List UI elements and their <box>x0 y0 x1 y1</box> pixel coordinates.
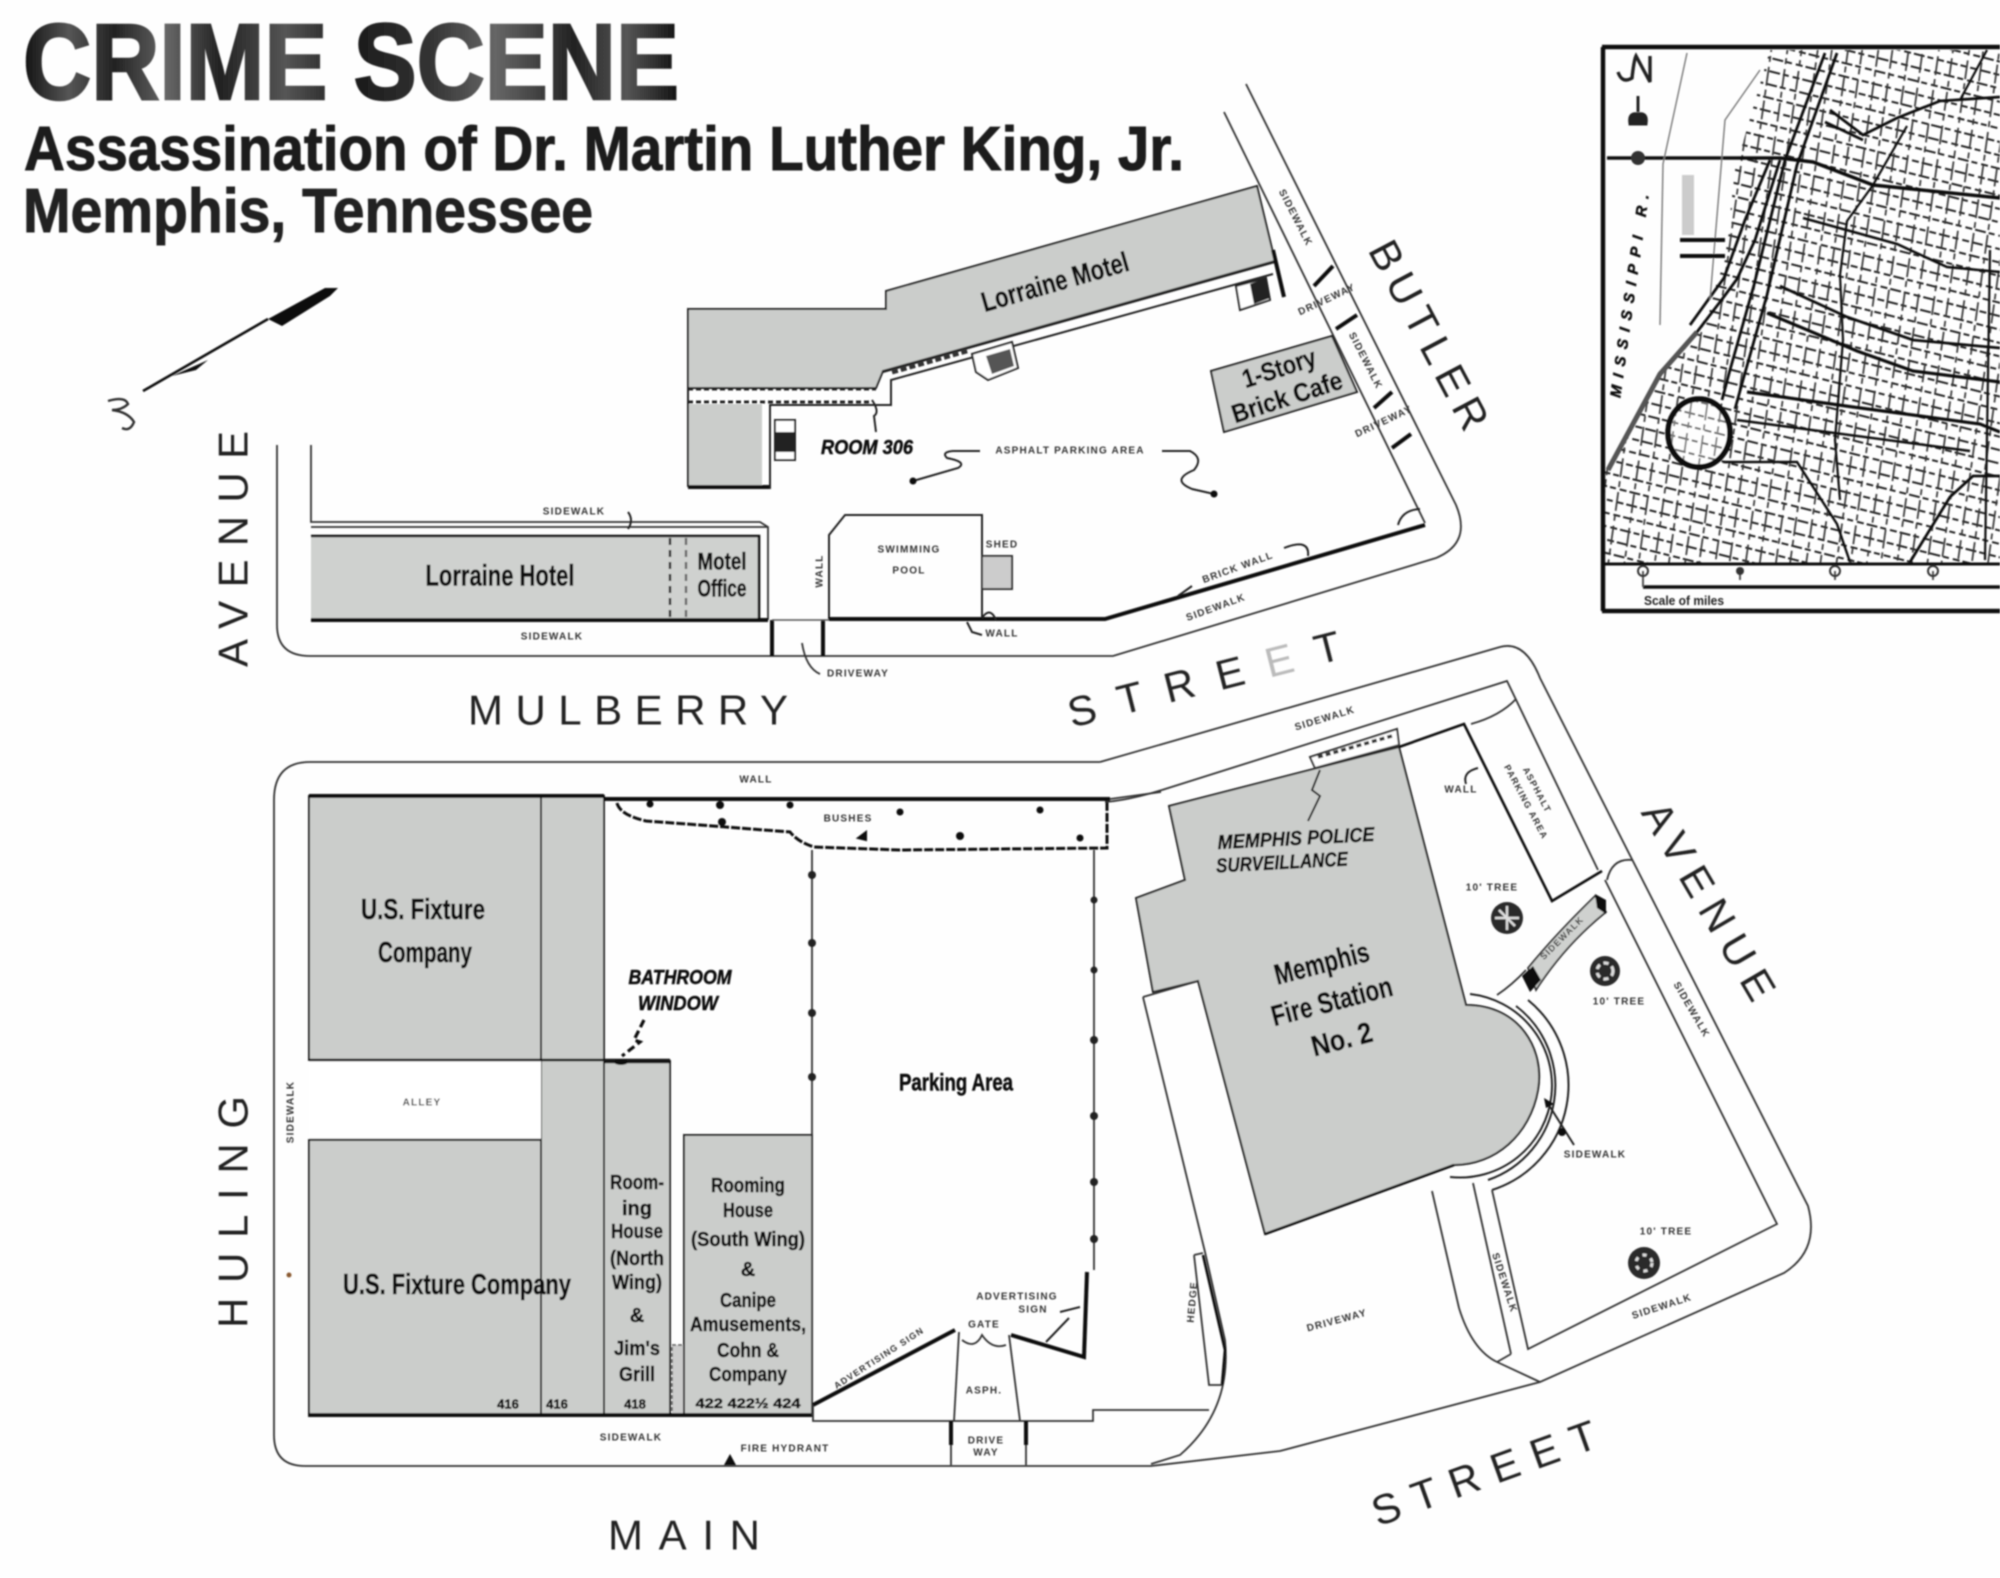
map major roads <box>1607 50 2000 562</box>
bushes and top wall: WALL <box>739 774 773 786</box>
Rooming House south wing: House <box>723 1200 773 1222</box>
Rooming House south wing: (South Wing) <box>691 1229 805 1251</box>
tree three: 10' TREE <box>1640 1226 1692 1238</box>
U.S. Fixture Company south building: 416 <box>497 1396 519 1412</box>
map scale bar: Scale of miles <box>1644 593 1724 608</box>
sidewalk labels around fire station: SIDEWALK <box>1294 705 1356 733</box>
U.S. Fixture Company north building: U.S. Fixture <box>361 894 485 926</box>
advertising signs and gate <box>813 1272 1209 1421</box>
advertising signs and gate: GATE <box>968 1320 1000 1330</box>
map location circle <box>1668 399 1730 467</box>
Room 306 callout: ROOM 306 <box>821 437 914 459</box>
asphalt parking area label (fire station): PARKING AREA <box>1502 763 1550 841</box>
south perimeter brick wall <box>829 525 1425 619</box>
fire station property wall and sidewalks <box>1105 681 1777 1382</box>
1-story brick cafe: Brick Cafe <box>1228 365 1346 429</box>
subtitle line: location: Memphis, Tennessee <box>23 177 593 246</box>
Butler sidewalk and driveway labels: DRIVEWAY <box>1354 404 1414 440</box>
Butler sidewalk and driveway labels: DRIVEWAY <box>1297 282 1357 318</box>
Rooming House north wing: ing <box>622 1198 652 1220</box>
alley: ALLEY <box>403 1098 441 1108</box>
Mulberry sidewalk labels: WALL <box>814 554 826 588</box>
tree one: 10' TREE <box>1466 882 1518 894</box>
Lorraine Hotel building <box>311 536 768 620</box>
street label: Butler: BUTLER <box>1359 232 1499 438</box>
wall label by parking area: WALL <box>1444 784 1478 796</box>
inset map <box>1602 47 2000 611</box>
Rooming House south wing: Amusements, <box>690 1314 806 1336</box>
Mulberry sidewalk labels: SIDEWALK <box>521 632 583 642</box>
Rooming House north wing: & <box>630 1305 644 1327</box>
Rooming House south wing: Company <box>709 1364 788 1386</box>
sidewalk labels around fire station: SIDEWALK <box>1489 1252 1519 1314</box>
tree two <box>1590 956 1645 1008</box>
Rooming House north wing: House <box>611 1221 663 1243</box>
Rooming House north wing: Wing) <box>612 1272 662 1294</box>
1-story brick cafe: 1-Story <box>1238 342 1320 394</box>
Mulberry sidewalk labels: SIDEWALK <box>1185 592 1247 624</box>
curved sidewalk strip: SIDEWALK <box>1538 914 1586 962</box>
curved driveway edge with hedge: HEDGE <box>1186 1281 1200 1323</box>
brick wall label: BRICK WALL <box>1201 550 1275 586</box>
Rooming House south wing: Cohn & <box>717 1340 779 1362</box>
Mulberry sidewalk labels: SIDEWALK <box>543 506 605 518</box>
north block sidewalk lines <box>311 112 1425 620</box>
Rooming House north wing: 418 <box>624 1396 646 1412</box>
Butler sidewalk and driveway labels: SIDEWALK <box>1276 188 1314 248</box>
street label: Street (Mulberry): STR E E T <box>1063 622 1345 736</box>
sidewalk labels around fire station: SIDEWALK <box>1671 980 1711 1040</box>
curved driveway edge with hedge <box>1143 997 1226 1464</box>
curved sidewalk strip <box>1497 894 1606 995</box>
advertising signs and gate: ADVERTISING SIGN <box>832 1325 926 1391</box>
Rooming House north wing: (North <box>610 1248 664 1270</box>
bathroom window callout: WINDOW <box>638 993 720 1015</box>
U.S. Fixture Company south building: U.S. Fixture Company <box>343 1269 571 1301</box>
sidewalk labels around fire station: SIDEWALK <box>1564 1150 1626 1160</box>
panel: north block (Lorraine Motel site) <box>277 84 1461 680</box>
Huling and Main sidewalk labels: SIDEWALK <box>286 1081 296 1143</box>
Rooming House north wing: Jim's <box>614 1338 660 1360</box>
north block curb line <box>277 84 1461 656</box>
Main Street building line <box>309 796 812 1415</box>
sidewalk labels around fire station <box>1294 705 1711 1334</box>
driveway on Mulberry: DRIVEWAY <box>827 668 889 680</box>
Room 306 callout <box>821 400 914 459</box>
street label: Mulberry: MULBERRY <box>468 686 788 734</box>
Mulberry sidewalk labels: WALL <box>985 628 1019 640</box>
map scale bar <box>1638 566 2000 608</box>
Lorraine Motel building: Lorraine Motel <box>978 246 1132 318</box>
fire hydrant <box>724 1444 829 1465</box>
passage between rooming house wings <box>672 1345 684 1414</box>
shed <box>982 540 1018 589</box>
alley <box>309 1060 670 1140</box>
asphalt parking area label with arrows: ASPHALT PARKING AREA <box>995 446 1145 456</box>
Memphis police surveillance callout <box>1216 729 1399 877</box>
icon: site north arrow <box>108 288 338 429</box>
map river shading <box>1682 175 1694 235</box>
Lorraine Hotel building: Lorraine Hotel <box>426 560 574 592</box>
Lorraine Hotel building: Office <box>698 576 746 602</box>
Rooming House south wing: & <box>741 1259 755 1281</box>
swimming pool <box>829 515 982 619</box>
asphalt parking area label with arrows <box>910 446 1218 498</box>
Memphis Fire Station No. 2: No. 2 <box>1308 1017 1376 1063</box>
Butler driveway marks <box>1314 266 1411 448</box>
Memphis police surveillance callout: MEMPHIS POLICE <box>1217 824 1376 854</box>
Rooming House south wing: Rooming <box>711 1175 785 1197</box>
Rooming House north wing: Room- <box>610 1172 664 1194</box>
parking area fence and label: Parking Area <box>899 1070 1013 1096</box>
U.S. Fixture Company south building <box>309 1140 571 1416</box>
U.S. Fixture Company north building: Company <box>378 937 472 969</box>
map river label: MISSISSIPPI R. <box>1607 193 1653 399</box>
bathroom window callout <box>614 967 733 1065</box>
Rooming House south wing: 422 422½ 424 <box>696 1395 801 1411</box>
street label: Avenue (Butler): AVENUE <box>1633 793 1785 1009</box>
bushes and top wall: BUSHES <box>824 814 872 824</box>
fire hydrant: FIRE HYDRANT <box>741 1444 829 1454</box>
south block curb line <box>274 646 1811 1466</box>
map frame <box>1602 47 2000 611</box>
Mulberry sidewalk labels <box>521 506 1247 642</box>
1-story brick cafe <box>1211 336 1357 432</box>
sidewalk labels around fire station: DRIVEWAY <box>1306 1308 1368 1334</box>
bushes and top wall <box>604 774 1161 850</box>
brick wall label <box>1178 544 1308 596</box>
Memphis Fire Station No. 2 <box>1136 747 1539 1234</box>
U.S. Fixture Company south building: 416 <box>546 1396 568 1412</box>
asphalt parking area label (fire station): ASPHALT <box>1521 765 1553 815</box>
Main Street driveway <box>951 1421 1026 1465</box>
U.S. Fixture Company north building <box>309 796 541 1060</box>
advertising signs and gate: ADVERTISING <box>976 1292 1058 1302</box>
tree two: 10' TREE <box>1593 996 1645 1008</box>
sidewalk labels around fire station: SIDEWALK <box>1631 1292 1693 1322</box>
Lorraine Motel building <box>688 186 1284 489</box>
parking area fence and label <box>808 850 1098 1415</box>
Memphis Fire Station No. 2: Fire Station <box>1268 971 1396 1033</box>
tree three <box>1628 1226 1692 1279</box>
swimming pool: POOL <box>892 566 926 576</box>
tree one <box>1466 882 1523 934</box>
Lorraine Hotel building: Motel <box>698 548 746 576</box>
fire station steps <box>1450 994 1568 1190</box>
wall label by parking area <box>1444 768 1478 796</box>
Butler sidewalk and driveway labels <box>1276 188 1414 440</box>
bathroom window callout: BATHROOM <box>628 967 733 989</box>
driveway on Mulberry <box>772 620 889 680</box>
shed: SHED <box>986 540 1018 550</box>
advertising signs and gate: SIGN <box>1018 1304 1048 1316</box>
Rooming House south wing <box>684 1135 812 1416</box>
Main Street driveway: DRIVE <box>968 1436 1004 1446</box>
panel: south block (Main Street) <box>274 646 1811 1466</box>
Main Street driveway: WAY <box>973 1448 999 1458</box>
street label: Street (Main): STREET <box>1365 1411 1603 1535</box>
subtitle line: assassination: Assassination of Dr. Martin Luther King, Jr. <box>24 115 1184 184</box>
street label: Avenue (Mulberry block, west): AVENUE <box>210 431 256 667</box>
Huling and Main sidewalk labels <box>286 1081 662 1444</box>
Memphis Fire Station No. 2: Memphis <box>1271 936 1373 992</box>
advertising signs and gate: ASPH. <box>966 1386 1002 1396</box>
Butler sidewalk and driveway labels: SIDEWALK <box>1346 331 1384 391</box>
Rooming House north wing: Grill <box>619 1364 655 1386</box>
Memphis police surveillance callout: SURVEILLANCE <box>1216 849 1349 877</box>
map street texture <box>1605 50 2000 564</box>
icon: map north symbol <box>1618 56 1650 165</box>
Huling and Main sidewalk labels: SIDEWALK <box>600 1432 662 1444</box>
Rooming House north wing <box>604 1061 670 1416</box>
connector building strip <box>541 796 604 1416</box>
Rooming House south wing: Canipe <box>720 1290 776 1312</box>
street label: Huling: HULING <box>210 1096 256 1328</box>
swimming pool: SWIMMING <box>878 544 940 556</box>
title: CRIME SCENE <box>23 1 679 122</box>
street label: Main: MAIN <box>608 1512 760 1558</box>
